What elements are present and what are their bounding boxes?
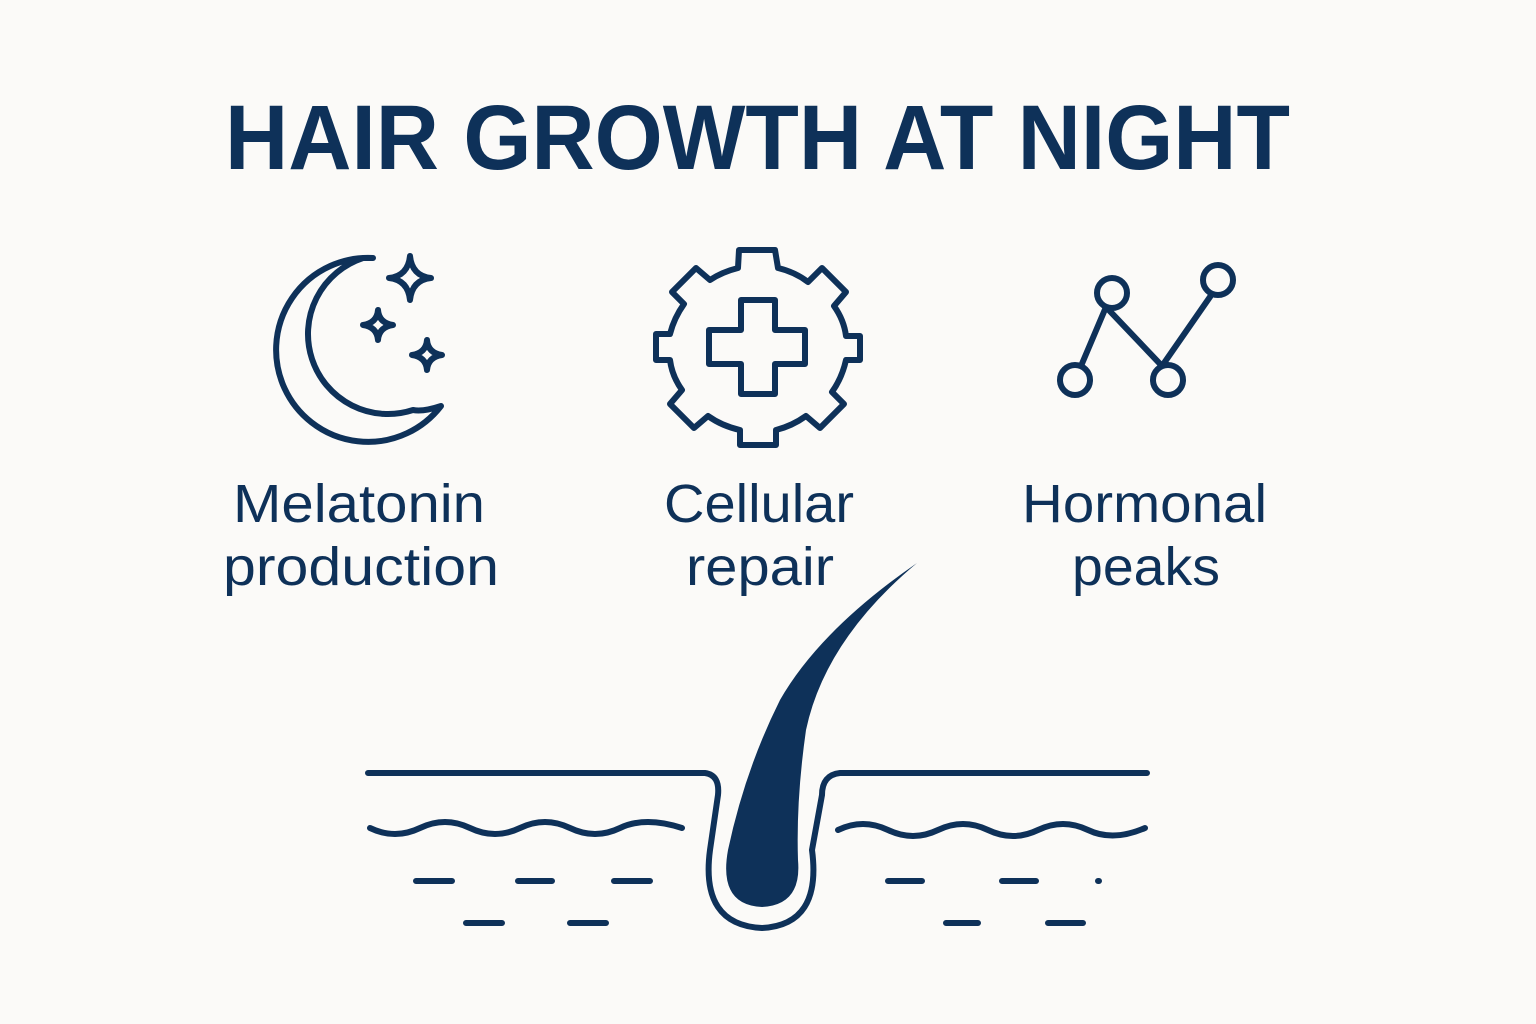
label: hormonal peaks: Hormonal [1022,474,1267,534]
icon: hormone peaks graph [1060,265,1233,395]
label: melatonin production [223,474,499,597]
label: hormonal peaks [1022,474,1267,597]
label: cellular repair: repair [686,537,834,597]
label: cellular repair: Cellular [664,474,854,534]
icon: gear with cross [656,250,860,445]
hair shaft [726,563,917,907]
illustration: hair follicle in skin [368,563,1147,928]
label: cellular repair [664,474,854,597]
label: melatonin production: Melatonin [233,474,485,534]
label: hormonal peaks: peaks [1072,537,1220,597]
title: HAIR GROWTH AT NIGHT [225,87,1290,189]
icon: moon and stars [276,256,442,442]
label: melatonin production: production [223,537,499,597]
